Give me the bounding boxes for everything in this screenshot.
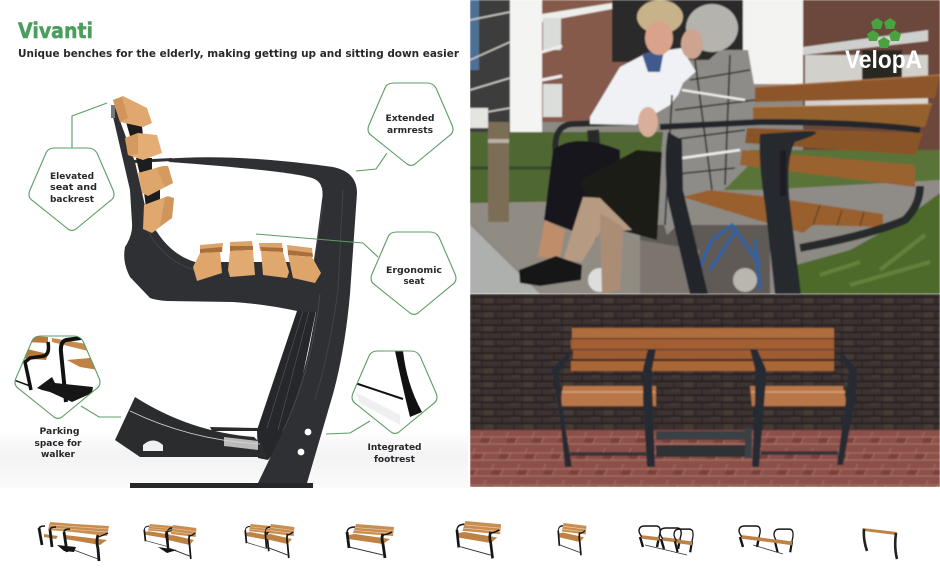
rear arm [555,122,640,155]
bench back slats [755,75,940,102]
back slats [571,328,834,371]
arm tip [133,158,172,163]
label: parking space for walker: space for [34,439,82,449]
thumbnail 4 [347,524,394,558]
callout: elevated seat and backrest: seat and [50,183,97,193]
thumbnail 3 [245,524,294,558]
brick wall [470,294,940,430]
back brackets [126,122,143,136]
callout: elevated seat and backrest [29,148,114,230]
photo background [470,59,896,294]
lower rails [570,453,838,454]
callout: elevated seat and backrest: Elevated [50,172,94,182]
callout: ergonomic seat: seat [404,277,424,287]
foot platform [656,428,752,458]
callout: ergonomic seat [371,232,456,314]
bench rear legs strips [257,311,316,460]
woman one coat [590,48,696,125]
subtitle: Unique benches for the elderly, making getting up and sitting down easier [18,48,460,60]
callout: extended armrests: Extended [386,114,434,124]
callout: elevated seat and backrest: backrest [50,195,94,205]
thumbnail 6 [558,523,586,555]
grass [796,193,940,294]
callout: extended armrests: armrests [387,126,433,136]
woman one scarf [642,50,664,72]
rail [210,427,258,431]
callout: extended armrests [368,83,453,166]
post [488,122,509,222]
thumbnail 8 [739,526,793,554]
brick pavement [470,430,940,487]
thumbnail 1 [39,522,109,561]
main frame [111,107,357,483]
bench arm and legs [660,122,920,130]
inset wood [32,336,48,343]
pavement [788,179,940,191]
seats [560,386,656,406]
wooden back slats [113,96,152,127]
label: parking space for walker: walker [41,450,76,460]
brick tower [542,0,629,123]
title: Vivanti [18,19,93,44]
bench seat [682,190,883,233]
woman two legs [563,197,632,262]
white wall right [743,0,803,84]
thumbnail 7 [639,526,693,555]
woman two shoe [519,256,582,286]
hands [638,107,658,137]
base plate [130,483,313,488]
walker frame [692,225,760,290]
woman one head [637,0,683,34]
leader lines [72,103,387,434]
logo: pentagons [867,18,901,48]
mounting holes [298,429,311,455]
woman one legs [544,141,620,240]
photo: two women on bench [470,0,940,294]
left building [470,0,510,132]
footrest [115,397,268,457]
callout: parking space inset [14,336,101,420]
label: parking space for walker [34,427,82,460]
label: integrated footrest: Integrated [368,443,422,453]
label: integrated footrest [368,443,422,465]
callout: ergonomic seat: Ergonomic [386,266,442,276]
logo: wordmark: VelopA [845,46,922,74]
woman two head [686,4,738,52]
thumbnail 9 [862,528,897,559]
hedges [470,132,680,204]
thumbnail 2 [144,524,196,559]
floor shadow [0,430,468,488]
photo: bench against brick wall [470,294,940,487]
centre dark window [650,0,743,60]
hinge [111,105,115,118]
white wall [510,0,542,132]
woman two coat [657,50,755,235]
callout: integrated footrest inset [351,350,438,434]
woman two skirt [580,150,662,240]
illustration: bench side view [111,96,357,488]
frames [552,349,857,467]
wooden seat slats [200,243,223,253]
label: parking space for walker: Parking [40,427,80,437]
product thumbnails [39,521,897,561]
thumbnail 5 [457,521,501,558]
label: integrated footrest: footrest [374,455,415,465]
right brick [803,0,940,154]
under-bench clutter [640,225,770,294]
